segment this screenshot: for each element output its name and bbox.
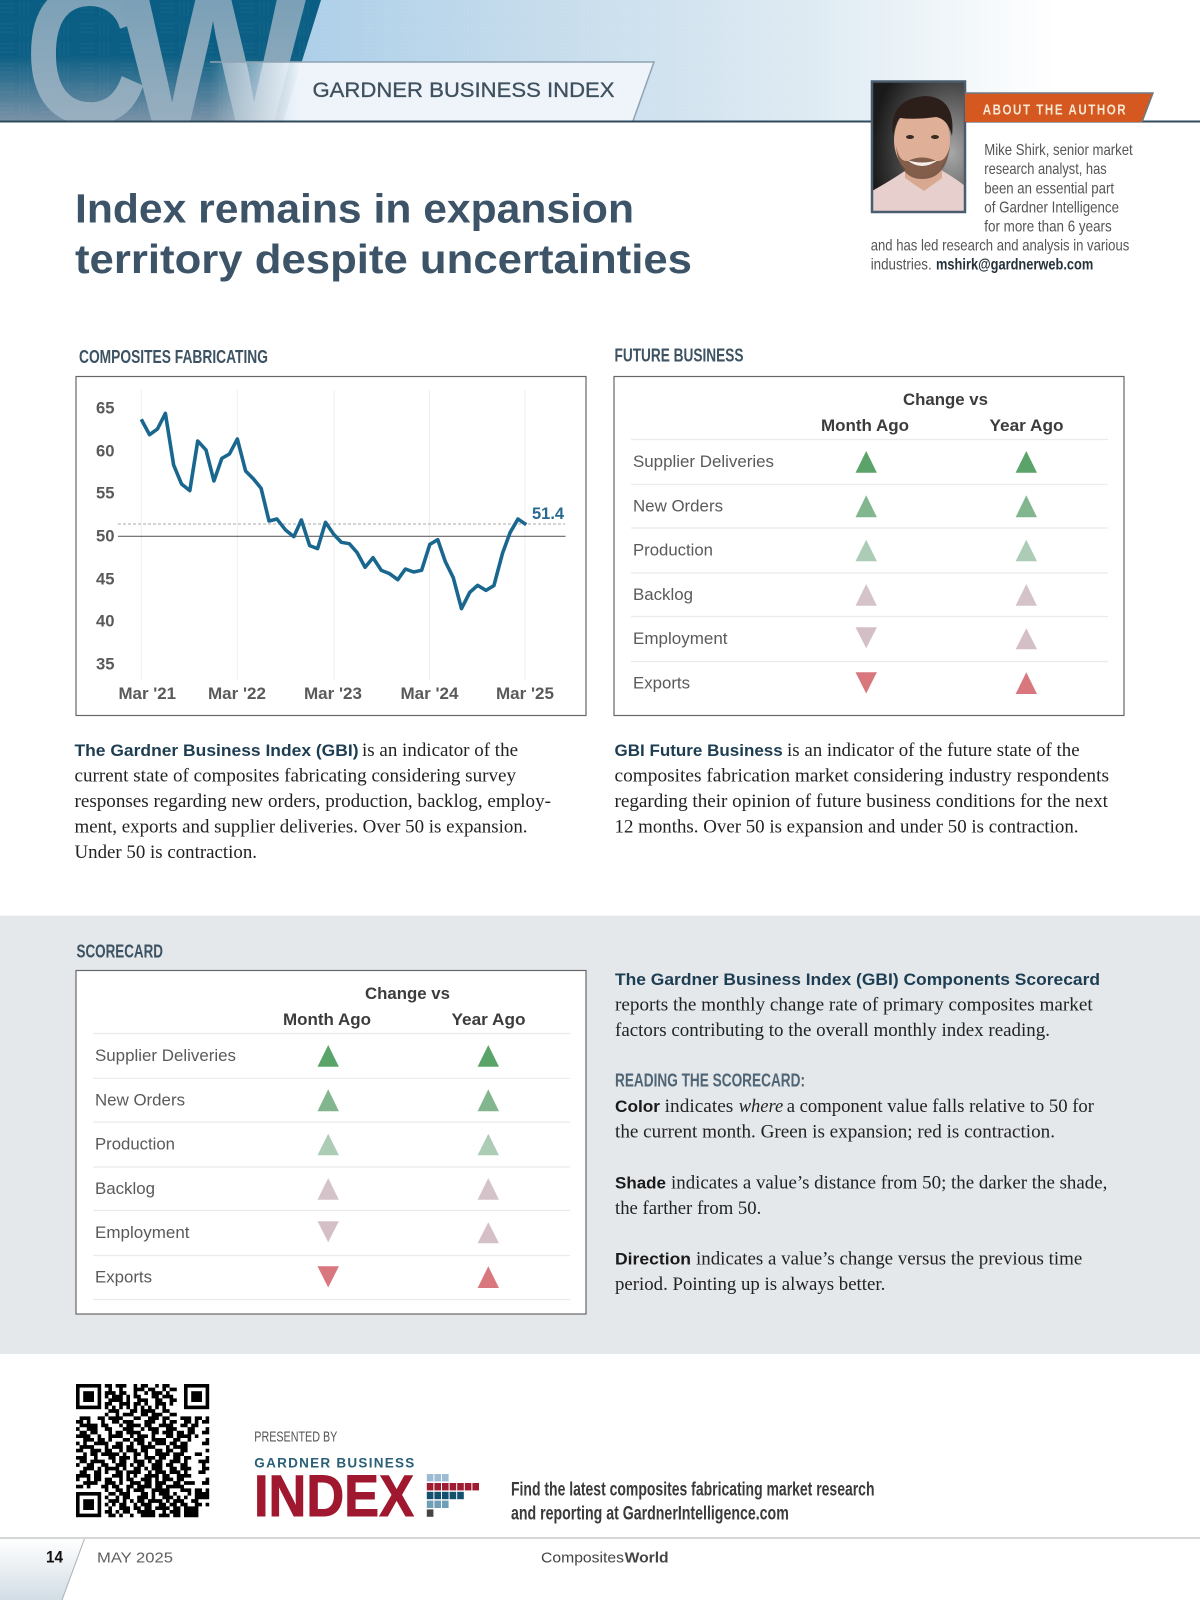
text: components scorecard: factors contributing to the overall monthly index reading. xyxy=(615,1020,1050,1041)
text: reading the scorecard: indicates a value’s change versus the previous time xyxy=(696,1248,1082,1269)
author bio: of Gardner Intelligence xyxy=(984,199,1119,216)
about the author xyxy=(871,81,1153,273)
author bio: been an essential part xyxy=(984,180,1114,197)
trend arrows xyxy=(856,451,1037,694)
panel: future business xyxy=(614,346,1124,716)
text: GBI description: is an indicator of the xyxy=(362,740,518,761)
text: reading the scorecard: the farther from 50. xyxy=(615,1198,761,1219)
panel: scorecard band xyxy=(0,916,1200,1354)
y axis labels: 55 xyxy=(96,484,114,502)
text: components scorecard xyxy=(615,970,1100,1041)
y axis labels: 45 xyxy=(96,570,114,588)
text: reading the scorecard: period. Pointing up is always better. xyxy=(615,1274,885,1295)
scorecard table: New Orders xyxy=(95,1090,185,1110)
text: reading the scorecard: READING THE SCORECARD: xyxy=(615,1071,805,1091)
heading: FUTURE BUSINESS xyxy=(614,346,744,366)
text: reading the scorecard: Color xyxy=(615,1097,660,1116)
x axis labels: Mar '23 xyxy=(304,685,362,703)
author bio: for more than 6 years xyxy=(984,218,1112,235)
x axis labels xyxy=(118,685,554,703)
author bio xyxy=(871,142,1133,273)
text: future business description: composites fabrication market considering industry respondents xyxy=(614,766,1109,786)
text: reading the scorecard: where xyxy=(739,1096,783,1117)
scorecard table: Production xyxy=(633,540,713,560)
text: GBI description: The Gardner Business Index (GBI) xyxy=(74,741,358,760)
scorecard table xyxy=(631,390,1108,694)
y axis labels: 50 xyxy=(96,528,114,546)
x axis labels: Mar '21 xyxy=(118,685,176,703)
call to action: and reporting at GardnerIntelligence.com xyxy=(511,1504,789,1524)
scorecard table: Backlog xyxy=(95,1179,155,1198)
author bio: research analyst, has xyxy=(984,161,1107,178)
text: future business description: regarding their opinion of future business conditions for the next xyxy=(614,791,1109,812)
scorecard table: Month Ago xyxy=(283,1010,371,1029)
scorecard table: Month Ago xyxy=(821,416,909,435)
author bio: and has led research and analysis in various xyxy=(871,237,1129,254)
logo: presented by Gardner Business Index xyxy=(254,1429,479,1529)
icon: pixel bars xyxy=(427,1474,479,1517)
scorecard table: Supplier Deliveries xyxy=(633,452,774,471)
banner: about the author xyxy=(965,93,1153,122)
text: GBI description: current state of composites fabricating considering survey xyxy=(74,766,516,786)
scorecard table: Change vs xyxy=(903,390,988,409)
text: GBI description: ment, exports and supplier deliveries. Over 50 is expansion. xyxy=(74,816,528,838)
footer xyxy=(0,1537,1200,1600)
header tab xyxy=(210,62,654,121)
title: Index remains in expansion xyxy=(75,186,634,232)
text: future business description: is an indicator of the future state of the xyxy=(787,740,1080,761)
heading: SCORECARD xyxy=(76,942,163,962)
publication name xyxy=(541,1551,669,1567)
line chart xyxy=(96,390,566,703)
scorecard table: Year Ago xyxy=(452,1010,526,1029)
text: reading the scorecard: the current month. Green is expansion; red is contraction. xyxy=(615,1122,1055,1143)
title: territory despite uncertainties xyxy=(75,236,692,282)
banner: about the author: ABOUT THE AUTHOR xyxy=(983,101,1127,118)
scorecard table: Production xyxy=(95,1134,175,1154)
trend arrows xyxy=(318,1045,499,1288)
text: GBI description: Under 50 is contraction. xyxy=(74,842,257,863)
author bio: industries. xyxy=(871,256,932,273)
text: components scorecard: The Gardner Business Index (GBI) Components Scorecard xyxy=(615,970,1100,989)
scorecard table: Employment xyxy=(95,1223,190,1242)
tab label: GARDNER BUSINESS INDEX xyxy=(312,79,614,102)
logo: presented by Gardner Business Index: GARDNER BUSINESS xyxy=(254,1455,414,1470)
scorecard table: Employment xyxy=(633,629,728,648)
author bio: mshirk@gardnerweb.com xyxy=(936,256,1093,273)
scorecard table: Change vs xyxy=(365,984,450,1003)
logo: CW xyxy=(31,0,306,120)
author bio: Mike Shirk, senior market xyxy=(984,142,1133,159)
text: reading the scorecard xyxy=(615,1071,1107,1295)
call to action: Find the latest composites fabricating market research xyxy=(511,1480,874,1500)
scorecard table: Supplier Deliveries xyxy=(95,1046,236,1065)
issue date: MAY 2025 xyxy=(97,1550,173,1567)
text: future business description xyxy=(614,740,1109,838)
publication name: Composites xyxy=(541,1551,624,1567)
publication name: World xyxy=(625,1551,669,1567)
text: reading the scorecard: Shade xyxy=(615,1173,666,1192)
call to action xyxy=(511,1480,874,1524)
scorecard table: Backlog xyxy=(633,585,693,604)
scorecard table: Year Ago xyxy=(990,416,1064,435)
y axis labels xyxy=(96,400,114,674)
scorecard table: Exports xyxy=(95,1268,152,1286)
scorecard table: Exports xyxy=(633,674,690,692)
y axis labels: 40 xyxy=(96,612,114,630)
text: reading the scorecard: indicates a value’s distance from 50; the darker the shade, xyxy=(671,1172,1107,1193)
y axis labels: 65 xyxy=(96,400,114,418)
text: reading the scorecard: a component value falls relative to 50 for xyxy=(787,1096,1095,1117)
scorecard table xyxy=(93,984,570,1300)
author photo xyxy=(872,81,965,212)
text: future business description: 12 months. Over 50 is expansion and under 50 is contraction. xyxy=(614,816,1078,838)
page number: 14 xyxy=(46,1548,63,1567)
scorecard table: New Orders xyxy=(633,496,723,516)
header band xyxy=(0,0,996,120)
title xyxy=(75,186,692,282)
text: components scorecard: reports the monthly change rate of primary composites market xyxy=(615,995,1093,1016)
logo: presented by Gardner Business Index: INDEX xyxy=(254,1464,414,1529)
text: reading the scorecard: indicates xyxy=(665,1096,733,1117)
heading: COMPOSITES FABRICATING xyxy=(79,347,268,367)
x axis labels: Mar '22 xyxy=(208,685,266,703)
text: reading the scorecard: Direction xyxy=(615,1249,691,1268)
text: future business description: GBI Future Business xyxy=(614,741,783,760)
x axis labels: Mar '25 xyxy=(496,685,554,703)
panel: composites fabricating xyxy=(76,347,586,716)
logo: presented by Gardner Business Index: PRESENTED BY xyxy=(254,1429,337,1446)
x axis labels: Mar '24 xyxy=(400,685,459,703)
text: GBI description: responses regarding new orders, production, backlog, employ- xyxy=(74,791,551,812)
y axis labels: 60 xyxy=(96,442,114,460)
y axis labels: 35 xyxy=(96,656,114,674)
latest value: 51.4 xyxy=(532,505,565,523)
text: GBI description xyxy=(74,740,551,863)
QR code xyxy=(76,1386,209,1515)
